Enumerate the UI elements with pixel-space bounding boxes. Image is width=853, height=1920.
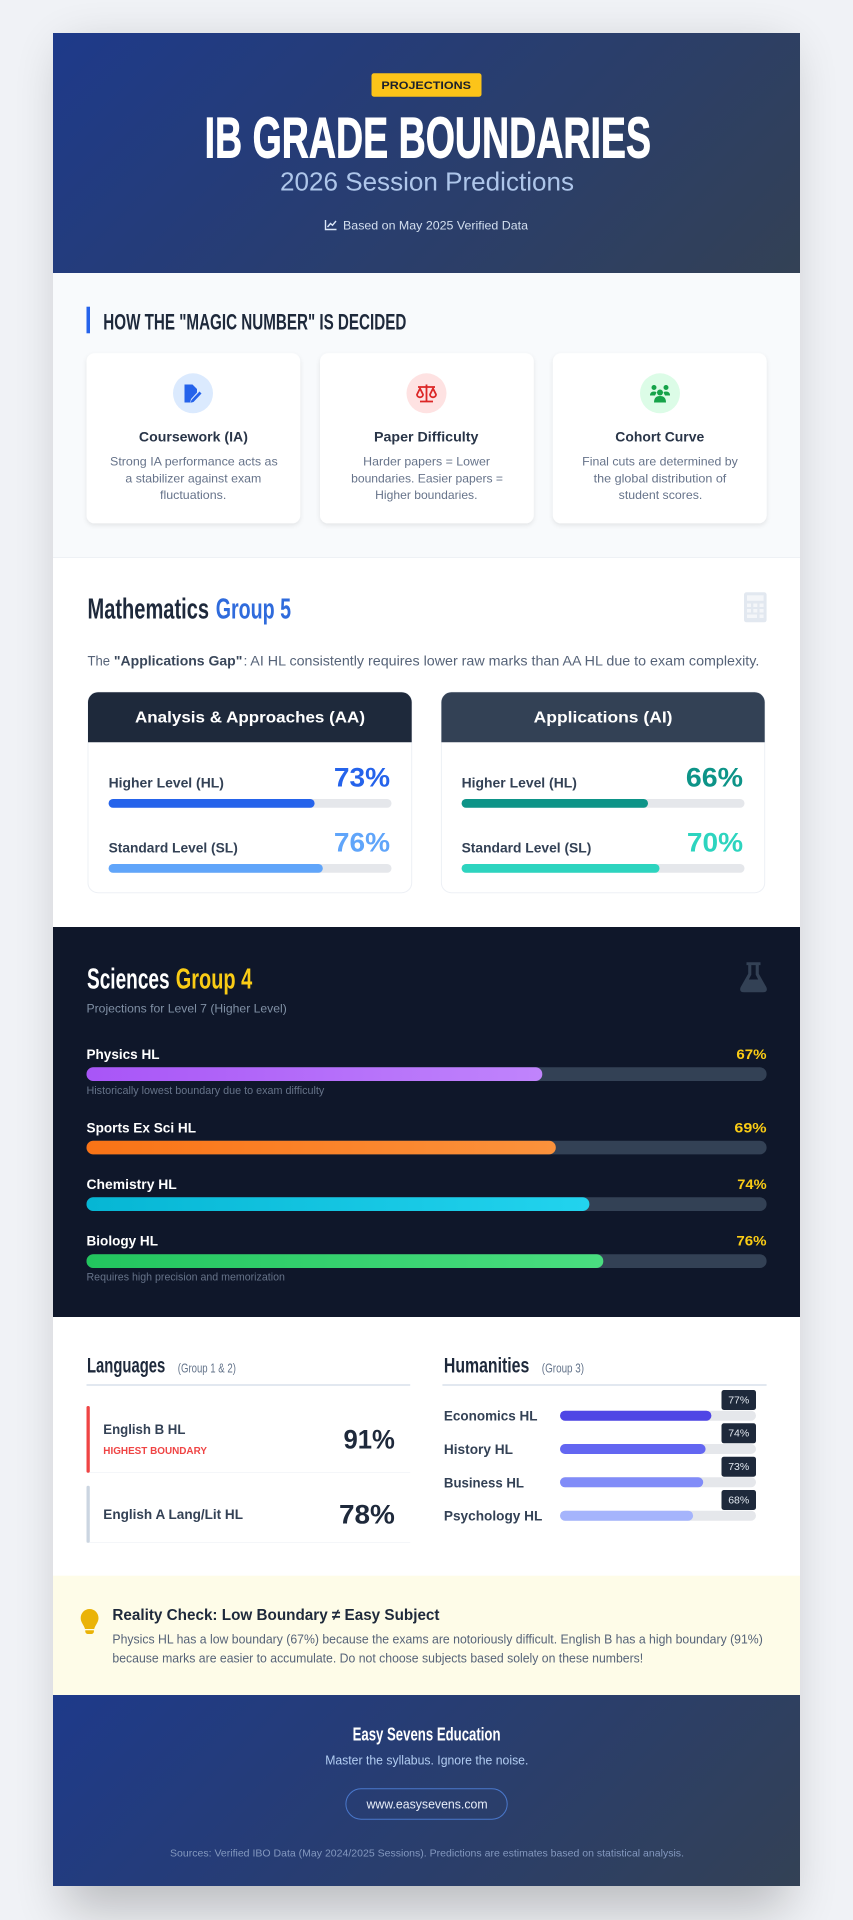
row: AI standard level: 70% [687, 828, 743, 858]
data source note: Based on May 2025 Verified Data [343, 218, 528, 232]
item: english B: 91% [344, 1425, 395, 1455]
row: chemistry: 74% [737, 1176, 767, 1192]
card description: fluctuations. [160, 488, 226, 502]
card description: Strong IA performance acts as [110, 455, 278, 469]
callout body: Physics HL has a low boundary (67%) because the exams are notoriously difficult. English B has a high boundary (91%) [112, 1632, 763, 1646]
item: english B [86, 1406, 410, 1473]
tagline: Master the syllabus. Ignore the noise. [325, 1753, 528, 1767]
row: biology [86, 1233, 767, 1284]
panel: analysis and approaches [88, 692, 412, 893]
card title: Coursework (IA) [139, 428, 248, 444]
applications gap text: AI HL consistently requires lower raw marks than AA HL due to exam complexity. [250, 653, 759, 669]
row: sports exercise science [86, 1119, 767, 1154]
icon: light bulb [81, 1609, 98, 1634]
row: AA standard level: Standard Level (SL) [109, 839, 238, 855]
row: physics: Physics HL [86, 1046, 160, 1062]
section: languages [86, 1355, 410, 1543]
mathematics heading: Group 5 [216, 593, 291, 625]
section: mathematics [88, 592, 767, 893]
mathematics heading: Mathematics [88, 593, 209, 625]
row: AA higher level: 73% [334, 763, 390, 793]
heading accent bar [86, 307, 90, 333]
row: AA higher level [109, 763, 391, 808]
row: business: Business HL [444, 1474, 524, 1490]
sciences subtitle: Projections for Level 7 (Higher Level) [86, 1002, 287, 1016]
row: economics [444, 1390, 756, 1424]
icon: people group [640, 373, 680, 413]
row: AI standard level: Standard Level (SL) [462, 839, 591, 855]
sciences heading: Group 4 [176, 963, 252, 995]
row: biology: 76% [736, 1233, 767, 1249]
card description [110, 455, 278, 502]
row: psychology [444, 1490, 756, 1524]
projections badge: PROJECTIONS [381, 80, 471, 92]
callout body [112, 1632, 763, 1666]
card: paper difficulty [320, 353, 534, 523]
icon: file pen [173, 373, 213, 413]
callout title: Reality Check: Low Boundary ≠ Easy Subject [112, 1607, 440, 1624]
row: AI standard level [462, 828, 744, 873]
applications gap text: : [244, 653, 247, 669]
row: economics: Economics HL [444, 1408, 538, 1424]
row: history: 74% [728, 1428, 749, 1440]
item: english A: 78% [339, 1500, 395, 1530]
section: humanities [442, 1355, 767, 1524]
item: english A: English A Lang/Lit HL [103, 1506, 243, 1522]
callout: reality check [53, 1576, 800, 1695]
sources note: Sources: Verified IBO Data (May 2024/2025 Sessions). Predictions are estimates based on statistical analysis. [170, 1848, 684, 1860]
card title: Cohort Curve [615, 428, 704, 444]
website pill [346, 1789, 507, 1819]
row: biology: Requires high precision and memorization [86, 1272, 285, 1284]
sciences heading: Sciences [87, 963, 170, 995]
subtitle: 2026 Session Predictions [280, 167, 574, 197]
projections badge [372, 73, 482, 97]
header banner [53, 33, 800, 273]
row: AA higher level: Higher Level (HL) [109, 774, 224, 790]
row: history [444, 1423, 756, 1457]
brand name: Easy Sevens Education [353, 1725, 500, 1745]
languages heading: Languages [87, 1355, 165, 1378]
card description: Final cuts are determined by [582, 455, 738, 469]
row: chemistry: Chemistry HL [86, 1176, 177, 1192]
section: how the magic number is decided [53, 273, 800, 558]
callout body: because marks are easier to accumulate. Do not choose subjects based solely on these numbers! [112, 1652, 643, 1666]
item: english B: English B HL [103, 1421, 186, 1437]
card: coursework [86, 353, 300, 523]
panel header: Analysis & Approaches (AA) [135, 710, 365, 727]
humanities heading: Humanities [444, 1355, 529, 1378]
row: sports exercise science: Sports Ex Sci HL [86, 1119, 196, 1135]
card description: boundaries. Easier papers = [351, 471, 503, 485]
humanities heading [442, 1355, 767, 1386]
card description: Harder papers = Lower [363, 455, 490, 469]
section: sciences [53, 927, 800, 1317]
panel header: Applications (AI) [534, 710, 672, 727]
row: AI higher level [462, 763, 744, 808]
icon: line chart [326, 220, 336, 230]
row: AI higher level: Higher Level (HL) [462, 774, 577, 790]
row: history: History HL [444, 1441, 513, 1457]
row: economics: 77% [728, 1394, 749, 1406]
row: physics: 67% [736, 1046, 767, 1062]
card description: student scores. [619, 488, 702, 502]
row: AA standard level: 76% [334, 828, 390, 858]
card description: the global distribution of [594, 471, 727, 485]
card title: Paper Difficulty [374, 428, 479, 444]
humanities heading: (Group 3) [542, 1361, 584, 1376]
languages heading [86, 1355, 410, 1386]
item: english B: HIGHEST BOUNDARY [103, 1446, 207, 1457]
icon: balance scale [406, 373, 446, 413]
card description: a stabilizer against exam [125, 471, 261, 485]
card description [582, 455, 738, 502]
row: physics: Historically lowest boundary due to exam difficulty [86, 1085, 325, 1097]
panel: applications and interpretation [441, 692, 765, 893]
card description [351, 455, 503, 502]
item: english A [86, 1486, 410, 1543]
applications gap text: "Applications Gap" [114, 653, 242, 669]
panel header [88, 692, 412, 742]
panel header [441, 692, 765, 742]
card: cohort curve [553, 353, 767, 523]
row: physics [86, 1046, 767, 1097]
row: AA standard level [109, 828, 391, 873]
row: AI higher level: 66% [686, 763, 743, 793]
website pill: www.easysevens.com [366, 1797, 488, 1811]
footer [53, 1695, 800, 1886]
row: psychology: Psychology HL [444, 1508, 543, 1524]
icon: calculator [744, 592, 767, 622]
applications gap text: The [88, 653, 110, 669]
row: biology: Biology HL [86, 1233, 158, 1249]
section heading: HOW THE "MAGIC NUMBER" IS DECIDED [103, 309, 406, 334]
row: psychology: 68% [728, 1494, 749, 1506]
row: business: 73% [728, 1461, 749, 1473]
languages heading: (Group 1 & 2) [178, 1361, 236, 1376]
row: business [444, 1457, 756, 1490]
row: chemistry [86, 1176, 767, 1211]
row: sports exercise science: 69% [734, 1119, 767, 1135]
card description: Higher boundaries. [375, 488, 478, 502]
icon: flask [740, 962, 767, 992]
